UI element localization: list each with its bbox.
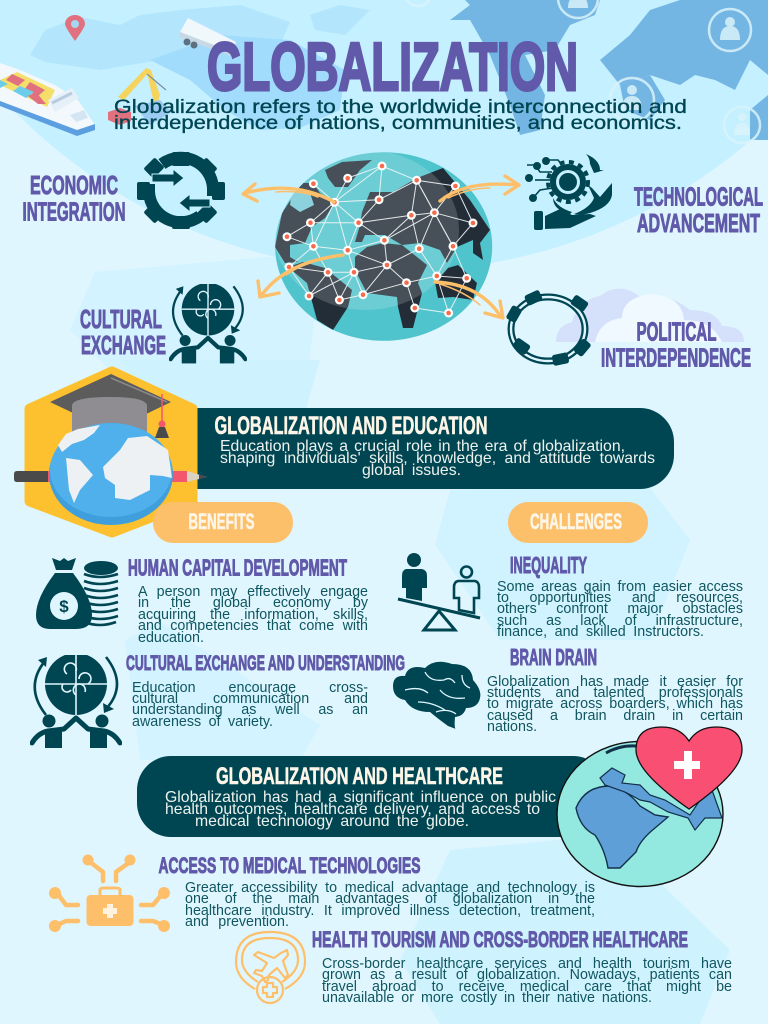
icon: cultural exchange puzzle: [171, 283, 245, 363]
pill: challenges: [508, 502, 648, 543]
icon: brain: [393, 662, 480, 729]
text: human capital development: in the global economy by: [138, 595, 368, 611]
panel text: education: Education plays a crucial role in the era of globalization,: [220, 438, 625, 454]
text: access to medical technologies: [185, 883, 605, 933]
panel text: education: [150, 440, 674, 480]
text: health tourism: [322, 959, 742, 1009]
decorative cloud behind political label: [556, 288, 744, 342]
icon: money bag and coins: $: [59, 597, 69, 616]
text: inequality: Some areas gain from easier access: [497, 578, 743, 594]
title: GLOBALIZATION: [207, 29, 578, 105]
heading: human capital development: HUMAN CAPITAL DEVELOPMENT: [128, 554, 347, 580]
text: brain drain: caused a brain drain in certain: [487, 708, 743, 724]
text: human capital development: education.: [138, 630, 204, 646]
central globe with network: [273, 150, 492, 341]
panel text: healthcare: medical technology around the globe.: [195, 813, 469, 830]
text: inequality: to opportunities and resources,: [497, 590, 743, 606]
pill: benefits: BENEFITS: [188, 509, 254, 534]
icon: earth with heart: [557, 727, 742, 886]
text: cultural exchange: Education encourage cross-: [132, 680, 368, 696]
icon: medical kit with circuit: [49, 854, 170, 932]
text: human capital development: A person may effectively engage: [138, 584, 368, 600]
label: economic integration: INTEGRATION: [22, 196, 125, 226]
panel text: education: shaping individuals' skills, knowledge, and attitude towards: [220, 450, 655, 467]
text: cultural exchange: cultural communication and: [132, 691, 368, 707]
icon: seesaw inequality: [398, 553, 480, 630]
text: brain drain: nations.: [487, 719, 537, 735]
text: access to medical technologies: one of the main advantages of globalization in the: [185, 891, 595, 907]
text: brain drain: to migrate across boarders, which has: [487, 696, 743, 712]
text: health tourism: travel abroad to receive medical care that might be: [322, 979, 732, 995]
text: access to medical technologies: Greater accessibility to medical advantage and technology is: [185, 880, 595, 896]
panel: globalization and healthcare: [137, 756, 607, 837]
intro text: [114, 97, 687, 134]
text: cultural exchange: awareness of variety.: [132, 714, 273, 730]
illustration: harbour crane: [108, 68, 172, 125]
text: health tourism: unavailable or more costly in their native nations.: [322, 990, 652, 1006]
label: economic integration: [22, 170, 125, 226]
icon: puzzle and people: [32, 653, 120, 748]
panel text: healthcare: health outcomes, healthcare delivery, and access to: [165, 801, 540, 818]
text: brain drain: students and talented professionals: [487, 685, 743, 701]
heading: inequality: INEQUALITY: [510, 552, 587, 578]
label: cultural exchange: CULTURAL: [80, 304, 162, 334]
icon: ring of joined hands: [506, 290, 591, 366]
icon: technology gear and hand: [525, 154, 612, 230]
label: cultural exchange: [80, 304, 166, 360]
text: human capital development: acquiring the information, skills,: [138, 607, 368, 623]
arrows from globe to the four themes: [243, 176, 519, 318]
panel text: healthcare: [137, 792, 562, 832]
heading: cultural exchange and understanding: CULTURAL EXCHANGE AND UNDERSTANDING: [126, 652, 405, 675]
text: human capital development: [138, 587, 378, 647]
label: economic integration: ECONOMIC: [30, 170, 118, 200]
label: cultural exchange: EXCHANGE: [81, 330, 166, 360]
heading: brain drain: BRAIN DRAIN: [510, 644, 597, 670]
text: cultural exchange: understanding as well as an: [132, 702, 368, 718]
heading: globalization and education: GLOBALIZATION AND EDUCATION: [214, 412, 488, 440]
label: technological advancement: [634, 182, 763, 238]
illustration: truck: [180, 18, 236, 56]
illustration: container ship: [0, 63, 95, 136]
icon: money bag and coins: [36, 558, 118, 629]
text: human capital development: and competencies that come with: [138, 618, 368, 634]
text: cultural exchange: [132, 682, 372, 732]
pill: benefits: [153, 502, 293, 543]
heading: globalization and healthcare: GLOBALIZATION AND HEALTHCARE: [216, 763, 503, 790]
text: brain drain: [487, 676, 752, 736]
text: health tourism: grown as a result of globalization. Nowadays, patients can: [322, 967, 732, 983]
text: inequality: others confront major obstacles: [497, 601, 743, 617]
text: access to medical technologies: healthcare industry. It improved illness detection, treatment,: [185, 903, 595, 919]
icon: plane in globe with medical cross: [236, 932, 305, 1003]
intro text: Globalization refers to the worldwide interconnection and: [114, 97, 687, 118]
text: inequality: [497, 582, 752, 642]
panel text: education: global issues.: [362, 462, 461, 479]
heart: [636, 727, 742, 809]
heading: access to medical technologies: ACCESS TO MEDICAL TECHNOLOGIES: [158, 853, 420, 878]
label: political interdependence: [601, 316, 751, 372]
text: inequality: finance, and skilled Instructors.: [497, 624, 704, 640]
illustration: map pin: [65, 15, 85, 41]
text: access to medical technologies: and prevention.: [185, 914, 289, 930]
icon: economic integration gear: [137, 152, 225, 229]
text: inequality: such as lack of infrastructure,: [497, 613, 743, 629]
panel: globalization and education: [150, 408, 674, 489]
intro text: interdependence of nations, communities, and economics.: [114, 113, 682, 134]
icon: graduation globe badge: [14, 372, 207, 532]
pill: challenges: CHALLENGES: [530, 509, 622, 534]
text: brain drain: Globalization has made it easier for: [487, 674, 743, 690]
text: health tourism: Cross-border healthcare services and health tourism have: [322, 956, 732, 972]
panel text: healthcare: Globalization has had a significant influence on public: [165, 788, 556, 806]
